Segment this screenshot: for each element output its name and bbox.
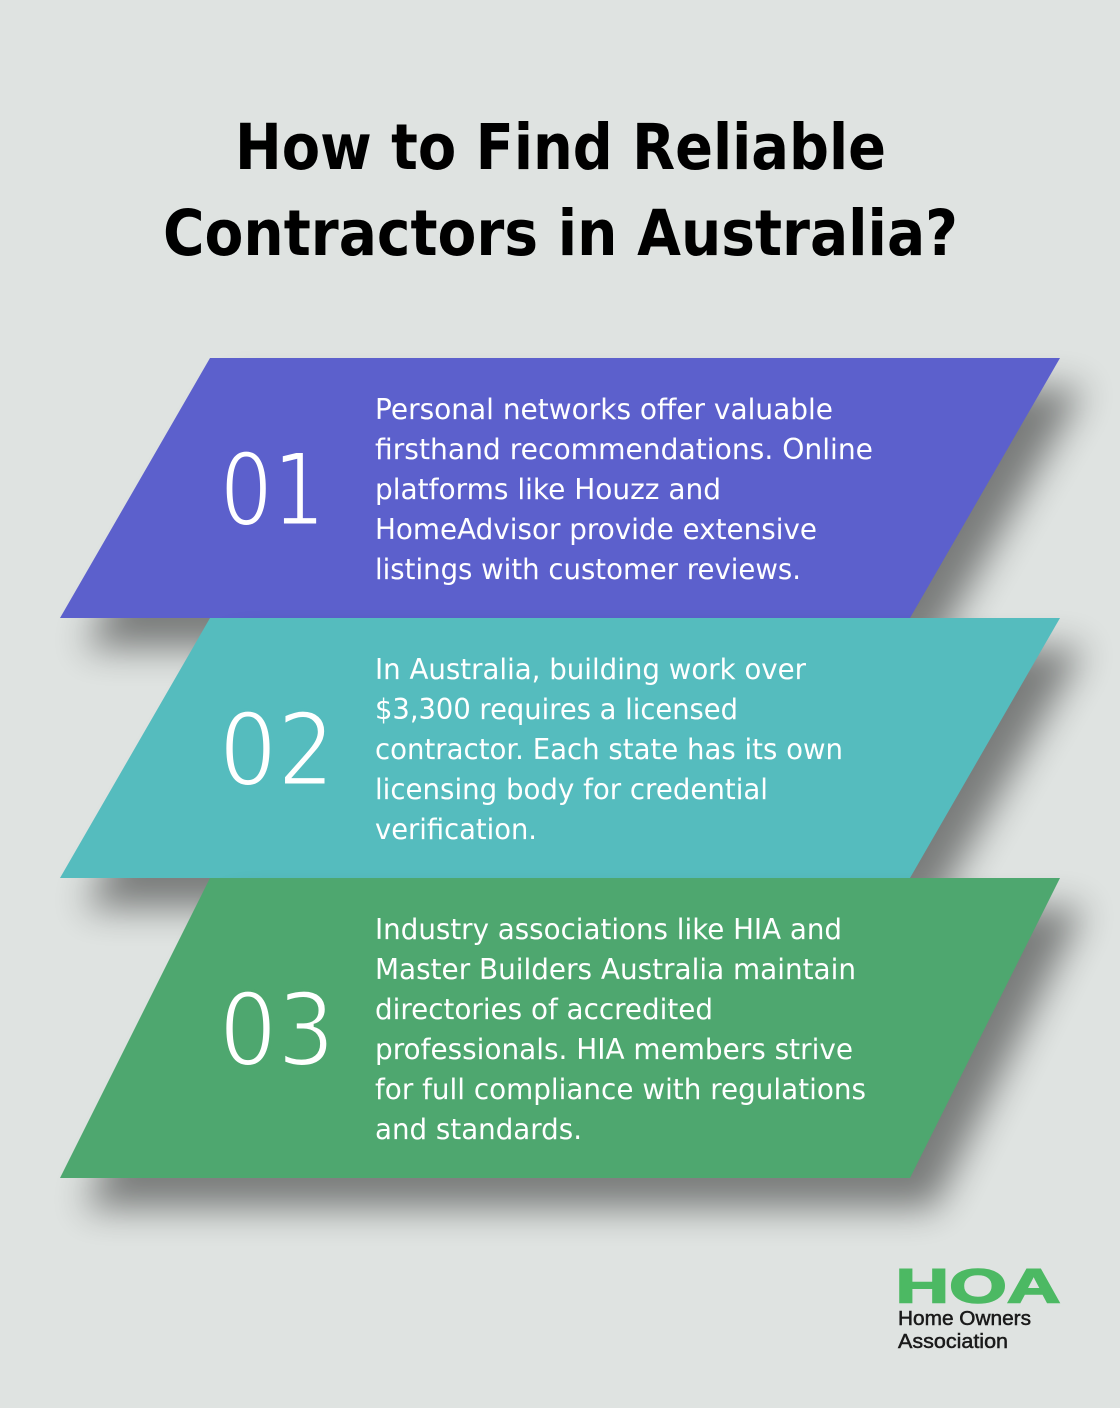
step 3 text — [375, 913, 866, 1146]
step 2 text — [375, 653, 843, 846]
step 1 number: 01 — [220, 431, 325, 549]
step 1 text — [375, 393, 873, 586]
step 2 text: verification. — [375, 813, 537, 846]
step 3 text: and standards. — [375, 1113, 582, 1146]
title — [163, 111, 958, 270]
panel: step 1 — [60, 358, 1084, 648]
panel: step 2 — [60, 618, 1084, 908]
logo: HOA Home Owners Association — [896, 1260, 1060, 1353]
title: Contractors in Australia? — [163, 197, 958, 270]
step 1 text: Personal networks offer valuable — [375, 393, 833, 426]
step 3 text: Master Builders Australia maintain — [375, 953, 856, 986]
panel: step 3 — [60, 878, 1084, 1208]
logo: HOA Home Owners Association: Association — [898, 1331, 1008, 1353]
step 2 text: $3,300 requires a licensed — [375, 693, 738, 726]
step 2 text: In Australia, building work over — [375, 653, 806, 686]
step 3 text: Industry associations like HIA and — [375, 913, 842, 946]
step 3 text: professionals. HIA members strive — [375, 1033, 853, 1066]
step 3 text: directories of accredited — [375, 993, 713, 1026]
step 3 text: for full compliance with regulations — [375, 1073, 866, 1106]
step 3 number: 03 — [219, 971, 335, 1089]
step 1 text: firsthand recommendations. Online — [375, 433, 873, 466]
step 1 text: platforms like Houzz and — [375, 473, 721, 506]
step 2 number: 02 — [219, 691, 335, 809]
title: How to Find Reliable — [235, 111, 886, 184]
logo: HOA Home Owners Association: HOA — [896, 1260, 1060, 1314]
step 2 text: contractor. Each state has its own — [375, 733, 843, 766]
logo: HOA Home Owners Association: Home Owners — [898, 1308, 1031, 1330]
step 2 text: licensing body for credential — [375, 773, 768, 806]
step 1 text: HomeAdvisor provide extensive — [375, 513, 817, 546]
step 1 text: listings with customer reviews. — [375, 553, 801, 586]
